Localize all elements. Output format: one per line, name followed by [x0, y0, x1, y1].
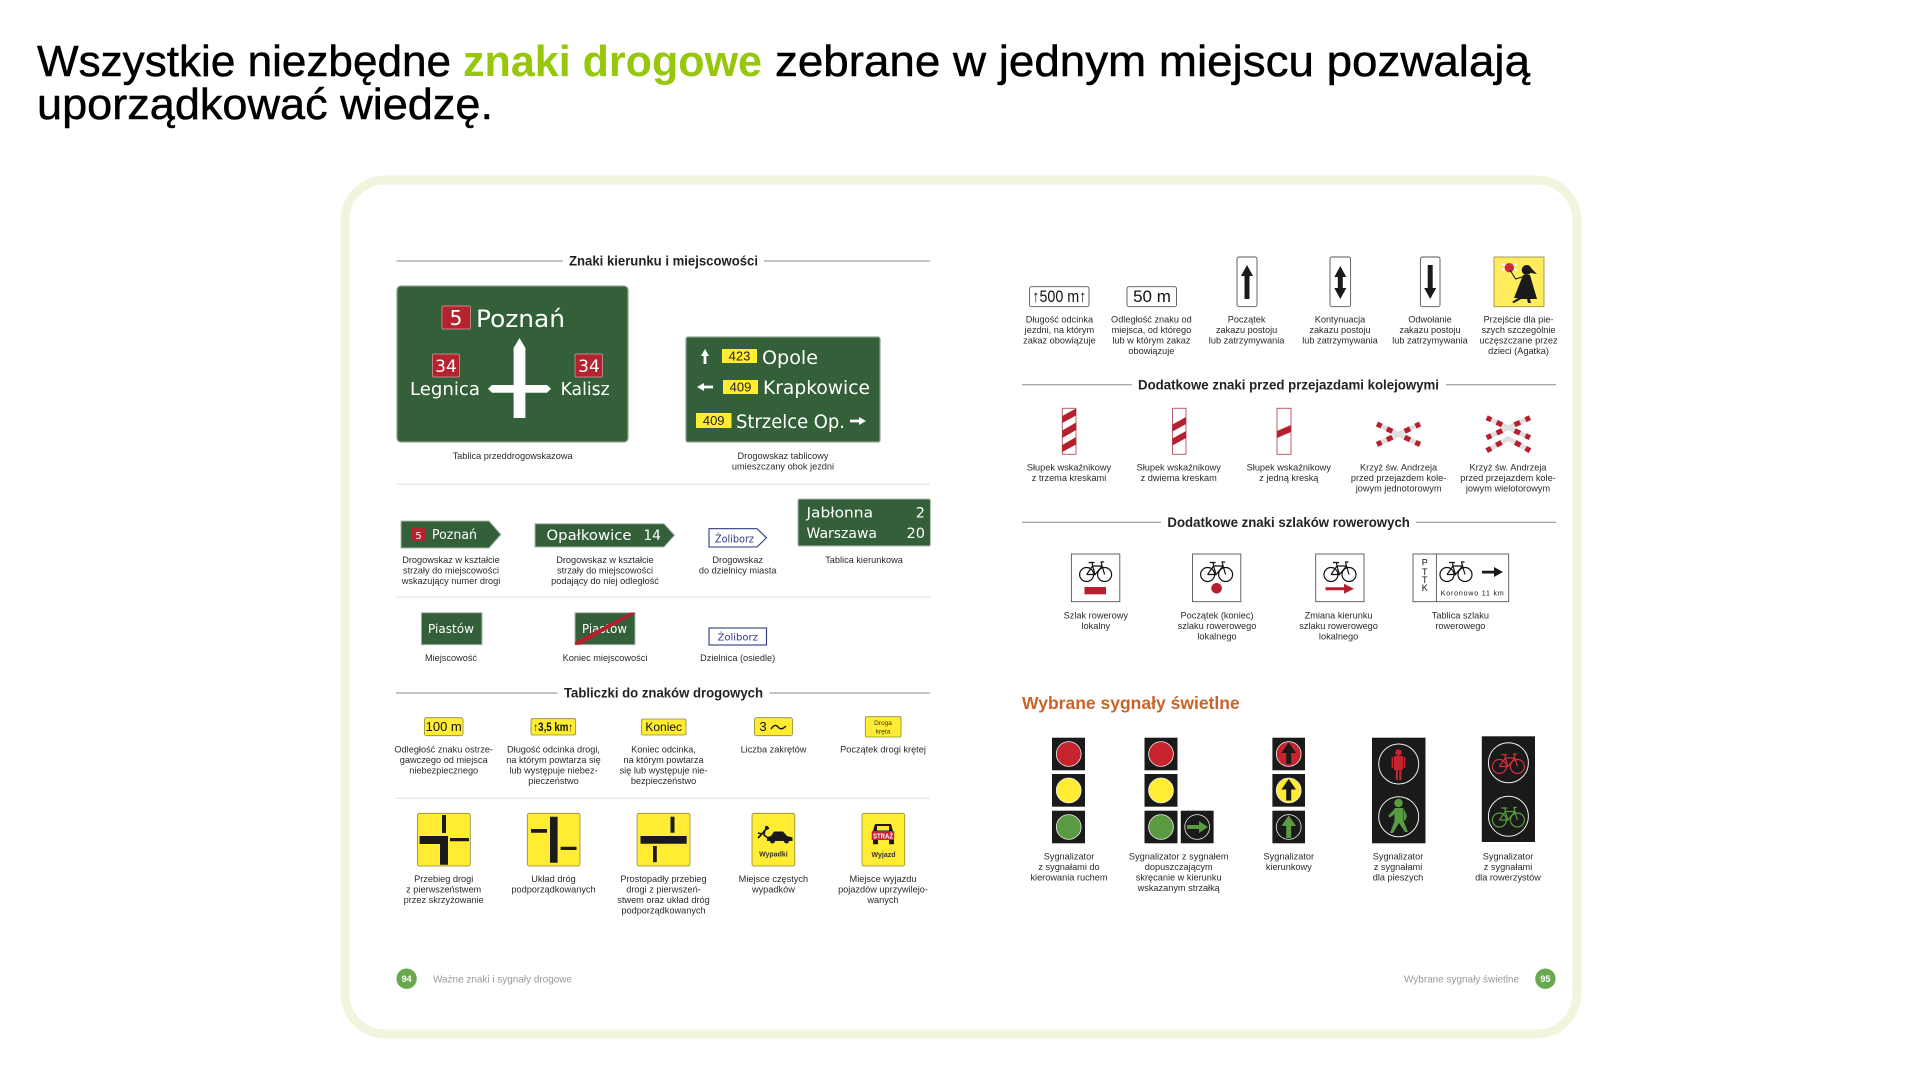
caption: Dzielnica (osiedle) [700, 653, 775, 663]
caption: z dwiema kreskam [1141, 473, 1217, 483]
caption: dzieci (Agatka) [1488, 346, 1549, 356]
caption: na którym powtarza się [506, 755, 601, 765]
post: dwie kreski [1172, 408, 1186, 454]
caption: Początek drogi krętej [840, 745, 926, 755]
plate: 100 m: 100 m [426, 719, 462, 734]
caption: bezpieczeństwo [631, 776, 696, 786]
sign: arrow Poznań: Poznań [432, 528, 477, 543]
caption: dla pieszych [1373, 872, 1423, 882]
panel: book spread [345, 180, 1577, 1034]
caption: Krzyż św. Andrzeja [1360, 462, 1437, 472]
sign: Żoliborz: Żoliborz [718, 631, 758, 644]
sign: arrow Opałkowice [535, 524, 674, 547]
caption: Drogowskaz tablicowy [738, 451, 828, 461]
caption: pieczeństwo [528, 776, 579, 786]
caption: Miejscowość [425, 653, 477, 663]
caption: Przebieg drogi [414, 874, 473, 884]
sign: Tablica przeddrogowskazowa: Legnica [410, 379, 480, 400]
caption: Tablica przeddrogowskazowa [453, 451, 573, 461]
plate: 1500 m: ↑500 m↑ [1032, 287, 1086, 306]
title [37, 37, 1531, 129]
caption: Kontynuacja [1315, 315, 1365, 325]
sign: Tablica kierunkowa: Warszawa [806, 526, 877, 542]
caption: Sygnalizator [1264, 851, 1314, 861]
caption: lub występuje niebez- [509, 766, 598, 776]
sign: Tablica przeddrogowskazowa: Kalisz [561, 379, 610, 400]
caption: Prostopadły przebieg [620, 874, 707, 884]
sign: Drogowskaz tablicowy: Krapkowice [763, 377, 870, 399]
caption: Długość odcinka drogi, [507, 745, 600, 755]
sign: arrow Poznań: 5 [415, 531, 422, 542]
caption: szlaku rowerowego [1299, 621, 1378, 631]
caption: Krzyż św. Andrzeja [1469, 462, 1547, 472]
caption: umieszczany obok jezdni [732, 462, 834, 472]
traffic light: cyclists [1482, 736, 1535, 842]
plate: odwołanie zakazu [1420, 257, 1440, 307]
sign: Piastów crossed: Piastów [582, 622, 627, 636]
plate: Droga kręta: Droga [874, 720, 892, 727]
caption: Liczba zakrętów [741, 745, 807, 755]
page number 94: 94 [402, 974, 412, 984]
heading: przejazdy kolejowe: Dodatkowe znaki przed przejazdami kolejowymi [1138, 378, 1439, 393]
sign: Wyjazd straży: Wyjazd [872, 852, 896, 859]
sign: Układ dróg [527, 813, 580, 866]
traffic light: directional [1272, 738, 1305, 843]
caption: lokalnego [1319, 631, 1358, 641]
sign: szlak lokalny [1071, 554, 1120, 602]
caption: z sygnałami [1374, 862, 1422, 872]
sign: Tablica przeddrogowskazowa: 5 [450, 306, 462, 330]
title: Wszystkie niezbędne [37, 37, 451, 86]
plate: 13,5 km: ↑3,5 km↑ [533, 720, 573, 734]
caption: Sygnalizator [1373, 851, 1423, 861]
caption: zakazu postoju [1399, 325, 1461, 335]
sign: tablica szlaku [1413, 554, 1509, 602]
plate: Droga kręta: kręta [876, 728, 891, 736]
caption: szlaku rowerowego [1178, 621, 1256, 631]
page number 95: 95 [1540, 974, 1550, 984]
caption: Tablica kierunkowa [825, 555, 904, 565]
plate: Koniec: Koniec [645, 720, 682, 734]
caption: Początek (koniec) [1180, 610, 1254, 620]
caption: przed przejazdem kole- [1460, 473, 1556, 483]
caption: wskazujący numer drogi [401, 576, 500, 586]
sign: Wypadki [752, 813, 795, 866]
caption: z sygnałami do [1038, 862, 1100, 872]
caption: strzały do miejscowości [403, 566, 499, 576]
sign: Wypadki: Wypadki [759, 852, 788, 859]
caption: Słupek wskaźnikowy [1247, 462, 1331, 472]
caption: Drogowskaz w kształcie [402, 555, 500, 565]
traffic light: standard [1052, 738, 1085, 843]
sign: Drogowskaz tablicowy: 423 [729, 348, 750, 364]
caption: Sygnalizator [1483, 851, 1533, 861]
title: zebrane w jednym miejscu pozwalają [775, 37, 1531, 86]
caption: Słupek wskaźnikowy [1027, 462, 1111, 472]
page number 94 [396, 968, 417, 989]
caption: lub zatrzymywania [1392, 336, 1469, 346]
sign: Agatka [1494, 257, 1544, 307]
caption: Miejsce wyjazdu [850, 874, 916, 884]
caption: dopuszczającym [1145, 862, 1213, 872]
sign: Piastów crossed [575, 613, 635, 645]
caption: do dzielnicy miasta [699, 566, 777, 576]
caption: lub zatrzymywania [1302, 336, 1379, 346]
heading: Znaki kierunku i miejscowości: Znaki kierunku i miejscowości [569, 254, 758, 269]
caption: miejsca, od którego [1112, 325, 1191, 335]
sign: Wyjazd straży [862, 813, 905, 866]
sign: arrow Opałkowice: 14 [643, 528, 661, 544]
plate: kontynuacja zakazu [1330, 257, 1351, 307]
sign: zmiana kierunku [1316, 554, 1364, 602]
sign: Prostopadły przebieg [637, 813, 690, 866]
title: uporządkować wiedzę. [37, 80, 493, 129]
sign: Piastów: Piastów [428, 622, 474, 636]
caption: zakaz obowiązuje [1023, 336, 1096, 346]
caption: lub w którym zakaz [1112, 336, 1191, 346]
sign: arrow Opałkowice: Opałkowice [546, 528, 632, 544]
sign: Tablica przeddrogowskazowa [397, 286, 628, 442]
sign: tablica szlaku: T [1422, 567, 1428, 577]
sign: początek szlaku [1192, 554, 1241, 602]
heading: Tabliczki: Tabliczki do znaków drogowych [564, 686, 763, 700]
plate: 3 zakręty [754, 718, 792, 736]
caption: skręcanie w kierunku [1136, 872, 1222, 882]
caption: rowerowego [1435, 621, 1485, 631]
caption: zakazu postoju [1216, 325, 1277, 335]
caption: lokalny [1081, 621, 1111, 631]
cross: wielotorowy [1487, 418, 1530, 451]
sign: Tablica przeddrogowskazowa: Poznań [476, 305, 565, 333]
caption: przed przejazdem kole- [1351, 473, 1446, 483]
sign: Wyjazd straży: STRAŻ [873, 832, 894, 840]
caption: Układ dróg [531, 874, 576, 884]
caption: Tablica szlaku [1432, 610, 1489, 620]
caption: Odwołanie [1408, 315, 1452, 325]
caption: niebezpiecznego [409, 766, 478, 776]
caption: zakazu postoju [1309, 325, 1371, 335]
caption: wanych [866, 895, 899, 905]
sign: arrow Żoliborz: Żoliborz [715, 533, 754, 546]
sign: Żoliborz [709, 628, 766, 645]
caption: lub zatrzymywania [1209, 336, 1285, 346]
sign: Tablica przeddrogowskazowa: 34 [578, 357, 600, 377]
caption: Koniec odcinka, [631, 745, 696, 755]
caption: na którym powtarza [623, 755, 704, 765]
sign: Piastów [421, 613, 482, 645]
caption: kierunkowy [1266, 862, 1312, 872]
post: trzy kreski [1062, 408, 1076, 454]
caption: Miejsce częstych [739, 874, 808, 884]
caption: się lub występuje nie- [620, 766, 707, 776]
caption: strzały do miejscowości [557, 566, 653, 576]
caption: jowym jednotorowym [1355, 483, 1442, 493]
sign: Drogowskaz tablicowy: 409 [703, 413, 725, 428]
caption: z trzema kreskami [1032, 473, 1106, 483]
sign: Tablica przeddrogowskazowa: 34 [435, 357, 457, 377]
caption: stwem oraz układ dróg [617, 895, 710, 905]
sign: Tablica kierunkowa [798, 499, 930, 546]
plate: 3 zakręty: 3 [759, 719, 767, 734]
sign: Drogowskaz tablicowy [686, 337, 880, 442]
sign: tablica szlaku: Koronowo 11 km [1441, 590, 1504, 597]
caption: Odległość znaku od [1111, 315, 1192, 325]
caption: wskazanym strzałką [1137, 883, 1221, 893]
caption: Odległość znaku ostrze- [394, 745, 493, 755]
traffic light: with green arrow [1144, 738, 1214, 843]
caption: Sygnalizator [1044, 851, 1094, 861]
heading: szlaki rowerowe: Dodatkowe znaki szlaków rowerowych [1167, 515, 1410, 530]
caption: jezdni, na którym [1024, 325, 1094, 335]
caption: Sygnalizator z sygnałem [1129, 851, 1228, 861]
caption: lokalnego [1197, 631, 1237, 641]
caption: Przejście dla pie- [1484, 315, 1553, 325]
caption: podporządkowanych [511, 884, 596, 894]
caption: gawczego od miejsca [400, 755, 489, 765]
sign: Tablica kierunkowa: 2 [916, 506, 925, 522]
sign: Tablica kierunkowa: 20 [907, 526, 925, 542]
caption: szych szczególnie [1481, 325, 1556, 335]
caption: dla rowerzystów [1475, 872, 1541, 882]
page number 95 [1535, 968, 1556, 989]
sign: arrow Żoliborz [709, 529, 766, 547]
sign: Przebieg drogi [417, 813, 470, 866]
sign: Drogowskaz tablicowy: 409 [730, 380, 751, 394]
caption: Koniec miejscowości [563, 653, 647, 663]
caption: z jedną kreską [1259, 473, 1319, 483]
caption: Drogowskaz w kształcie [556, 555, 654, 565]
caption: uczęszczane przez [1479, 336, 1558, 346]
sign: Drogowskaz tablicowy: Opole [762, 347, 818, 369]
caption: przez skrzyżowanie [404, 895, 484, 905]
caption: Drogowskaz [712, 555, 763, 565]
plate: Droga kręta [865, 717, 901, 737]
caption: wypadków [751, 884, 795, 894]
caption: jowym wielotorowym [1465, 483, 1550, 493]
sign: tablica szlaku: K [1422, 583, 1428, 593]
sign: Drogowskaz tablicowy: Strzelce Op. [736, 411, 845, 433]
caption: Słupek wskaźnikowy [1137, 462, 1221, 472]
caption: kierowania ruchem [1030, 872, 1108, 882]
sign: tablica szlaku: T [1422, 575, 1428, 585]
footer right: Wybrane sygnały świetlne [1404, 973, 1519, 985]
caption: Długość odcinka [1026, 315, 1093, 325]
caption: Początek [1228, 315, 1265, 325]
post: jedna kreska [1277, 408, 1291, 454]
caption: podporządkowanych [621, 906, 706, 916]
plate: 50 m: 50 m [1133, 287, 1171, 306]
caption: podający do niej odległość [551, 576, 659, 586]
sign: tablica szlaku: P [1422, 558, 1428, 568]
heading: Wybrane sygnały świetlne: Wybrane sygnały świetlne [1022, 693, 1240, 713]
plate: początek zakazu [1237, 257, 1257, 307]
title: znaki drogowe [463, 37, 762, 86]
sign: arrow Poznań [401, 521, 501, 548]
traffic light: pedestrians [1372, 738, 1426, 843]
caption: z pierwszeństwem [406, 884, 482, 894]
caption: Szlak rowerowy [1064, 610, 1128, 620]
caption: drogi z pierwszeń- [626, 884, 701, 894]
caption: pojazdów uprzywilejo- [838, 884, 928, 894]
caption: obowiązuje [1128, 346, 1174, 356]
caption: Zmiana kierunku [1305, 610, 1373, 620]
footer left: Ważne znaki i sygnały drogowe [433, 973, 572, 985]
cross: jednotorowy [1377, 424, 1420, 444]
caption: z sygnałami [1484, 862, 1532, 872]
sign: Tablica kierunkowa: Jabłonna [805, 506, 873, 522]
